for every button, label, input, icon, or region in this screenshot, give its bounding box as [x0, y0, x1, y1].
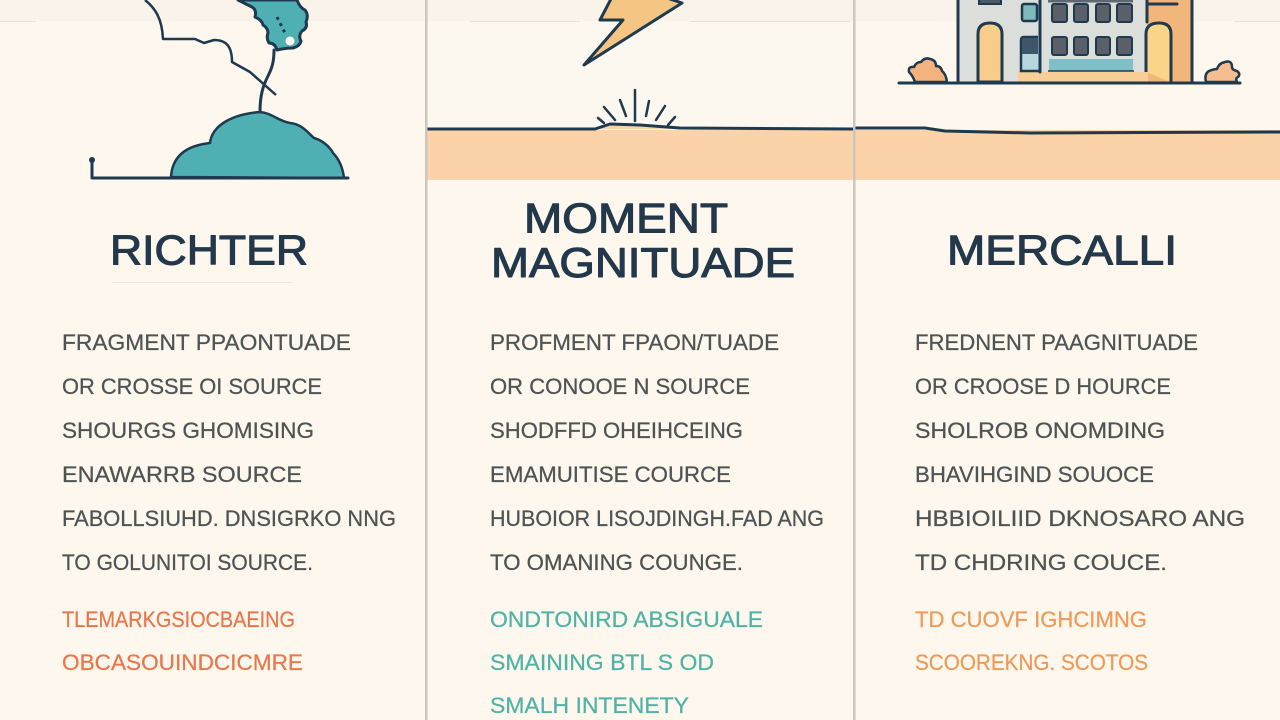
- text block: Moment description: PROFMENT FPAON/TUADE: [490, 330, 779, 355]
- text block: Richter description: FRAGMENT PPAONTUADE: [62, 330, 351, 355]
- illustration: ground with rupture rays: [427, 90, 854, 180]
- callout: Mercalli note: TD CUOVF IGHCIMNG: [915, 607, 1147, 632]
- heading: Richter: RICHTER: [110, 226, 308, 274]
- callout: Moment note: SMALH INTENETY: [490, 693, 689, 718]
- heading: Moment Magnitude: MOMENT: [524, 194, 728, 242]
- illustration: ground strip: [855, 128, 1280, 180]
- heading: Mercalli: MERCALLI: [947, 226, 1177, 274]
- text block: Richter description: FABOLLSIUHD. DNSIGRKO NNG: [62, 506, 396, 531]
- text block: Moment description: HUBOIOR LISOJDINGH.FAD ANG: [490, 506, 824, 531]
- text block: Richter description: [62, 330, 396, 575]
- text block: Mercalli description: OR CROOSE D HOURCE: [915, 374, 1171, 399]
- text block: Mercalli description: SHOLROB ONOMDING: [915, 418, 1165, 443]
- text block: Moment description: SHODFFD OHEIHCEING: [490, 418, 743, 443]
- illustration: building on ground: [899, 0, 1240, 83]
- callout: Moment note: ONDTONIRD ABSIGUALE: [490, 607, 763, 632]
- panel: Moment Magnitude: [427, 0, 854, 718]
- illustration: lightning bolt: [584, 0, 682, 65]
- text block: Mercalli description: FREDNENT PAAGNITUADE: [915, 330, 1198, 355]
- callout: Richter note: TLEMARKGSIOCBAEING: [62, 607, 295, 632]
- callout: Mercalli note: [915, 607, 1148, 675]
- callout: Richter note: OBCASOUINDCICMRE: [62, 650, 303, 675]
- text block: Mercalli description: [915, 330, 1245, 575]
- text block: Moment description: EMAMUITISE COURCE: [490, 462, 731, 487]
- panel: Mercalli: [855, 0, 1280, 675]
- text block: Richter description: ENAWARRB SOURCE: [62, 462, 302, 487]
- text block: Moment description: TO OMANING COUNGE.: [490, 550, 743, 575]
- text block: Mercalli description: HBBIOILIID DKNOSARO ANG: [915, 506, 1245, 531]
- heading: Moment Magnitude: MAGNITUADE: [491, 239, 795, 286]
- illustration: eruption cloud and seismic line: [89, 0, 348, 178]
- text block: Moment description: [490, 330, 824, 575]
- text block: Richter description: SHOURGS GHOMISING: [62, 418, 314, 443]
- callout: Moment note: SMAINING BTL S OD: [490, 650, 714, 675]
- heading: Moment Magnitude: [491, 194, 795, 286]
- text block: Mercalli description: BHAVIHGIND SOUOCE: [915, 462, 1154, 487]
- callout: Mercalli note: SCOOREKNG. SCOTOS: [915, 650, 1148, 675]
- callout: Richter note: [62, 607, 303, 675]
- panel: Richter: [62, 0, 396, 675]
- text block: Mercalli description: TD CHDRING COUCE.: [915, 550, 1167, 575]
- text block: Richter description: TO GOLUNITOI SOURCE.: [62, 550, 313, 575]
- text block: Richter description: OR CROSSE OI SOURCE: [62, 374, 322, 399]
- text block: Moment description: OR CONOOE N SOURCE: [490, 374, 750, 399]
- windows: [1052, 4, 1132, 55]
- callout: Moment note: [490, 607, 763, 718]
